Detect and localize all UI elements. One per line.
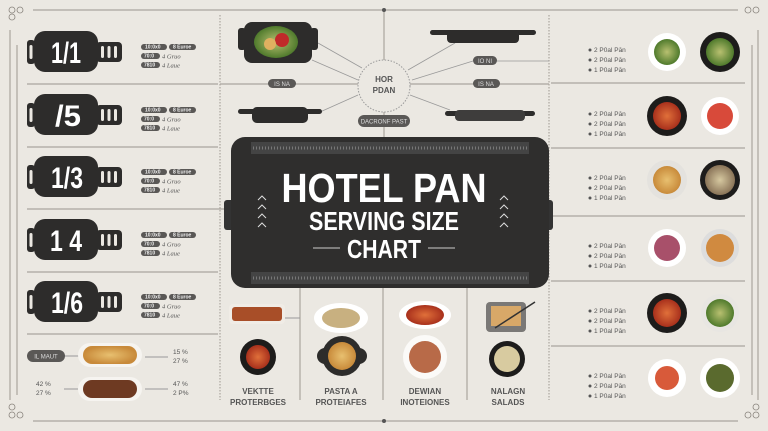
bottom food columns: SALADS — [492, 398, 525, 407]
center top diagram — [238, 22, 549, 127]
main title pan: HOTEL PAN — [282, 165, 486, 211]
row 1/1 — [27, 31, 196, 72]
left bottom comparison: IL MAUT — [34, 354, 58, 360]
center top diagram: DACRONF PAST — [361, 120, 408, 126]
main title pan — [224, 137, 553, 288]
center top diagram: HOR — [375, 75, 393, 84]
row 1 4: 1 4 — [50, 225, 82, 258]
center top diagram: IS NA — [478, 82, 494, 88]
main title pan: CHART — [347, 234, 421, 264]
row /5 — [27, 94, 196, 135]
center top diagram: PDAN — [373, 86, 396, 95]
bottom food columns: DEWIAN — [409, 387, 441, 396]
flat pans — [430, 30, 536, 35]
row 1/3: 1/3 — [51, 162, 83, 195]
row 1 4 — [27, 219, 196, 260]
row 1/6: 1/6 — [51, 287, 83, 320]
bottom food columns: NALAGN — [491, 387, 525, 396]
left bottom comparison — [27, 343, 189, 401]
row 1/3 — [27, 156, 196, 197]
center top diagram: IS NA — [274, 82, 290, 88]
bottom food columns: PROTERBGES — [230, 398, 287, 407]
right rows — [588, 32, 740, 400]
left bottom comparison: 2 P% — [173, 390, 189, 397]
row 1/6 — [27, 281, 196, 322]
bottom food columns: VEKTTE — [242, 387, 274, 396]
row /5: /5 — [55, 100, 81, 133]
left bottom comparison: 42 % — [36, 381, 51, 388]
main title pan: SERVING SIZE — [309, 206, 459, 236]
bottom food columns: PROTEIAFES — [315, 398, 367, 407]
left bottom comparison: 47 % — [173, 381, 188, 388]
left bottom comparison: 15 % — [173, 349, 188, 356]
salad pan — [238, 28, 246, 50]
left bottom comparison: 27 % — [173, 358, 188, 365]
center top diagram: IO NI — [478, 59, 492, 65]
bottom food columns: INOTEIONES — [400, 398, 450, 407]
row 1/1: 1/1 — [51, 37, 81, 70]
bottom food columns — [229, 301, 535, 407]
left bottom comparison: 27 % — [36, 390, 51, 397]
bottom food columns: PASTA A — [324, 387, 358, 396]
